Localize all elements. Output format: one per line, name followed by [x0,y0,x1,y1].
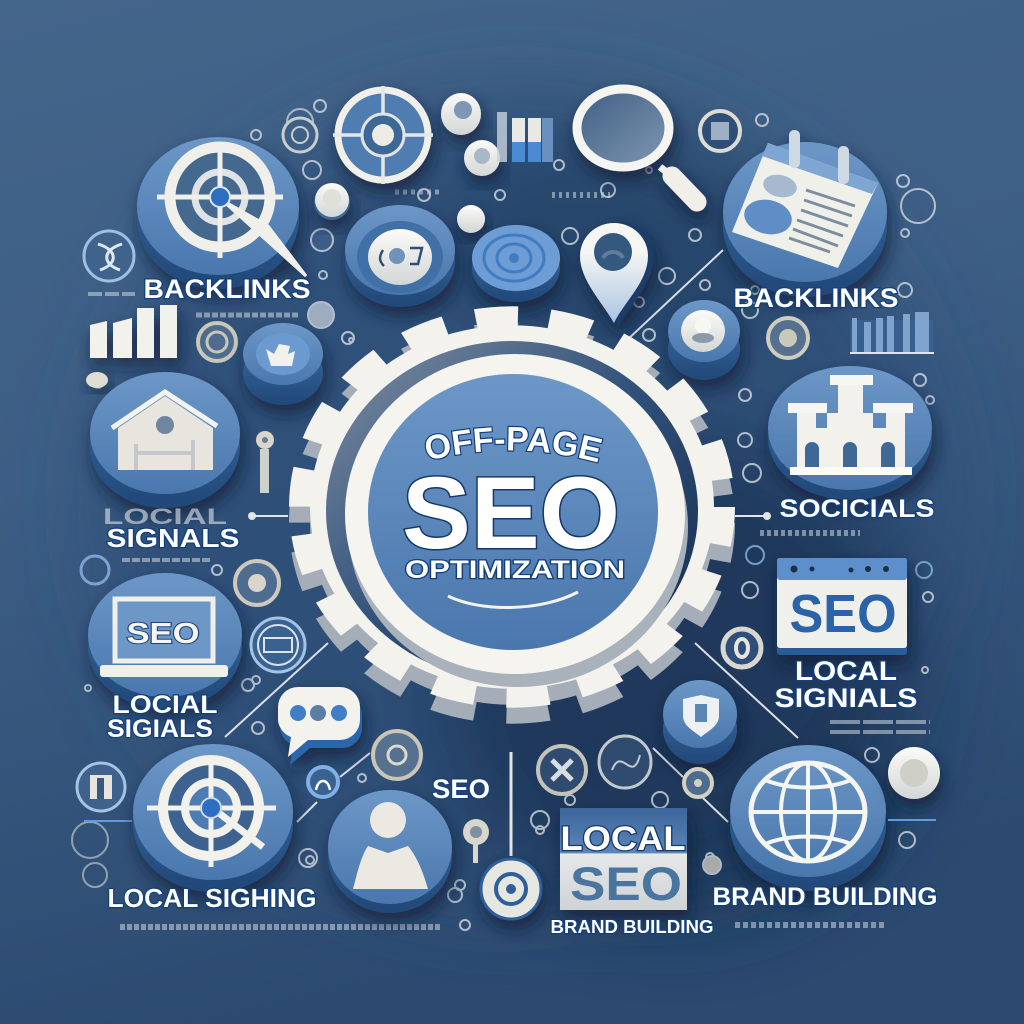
label: brand building large: BRAND BUILDING [712,883,938,911]
icon: person on blue circle [328,790,452,913]
icon: top bars [497,112,553,162]
label: small seo: SEO [432,774,490,804]
icon: swirl ring top [283,118,317,152]
icon: white button with blue centre [441,93,481,135]
panel: local seo block: LOCAL [560,820,686,858]
label: backlinks right: BACKLINKS [734,283,898,313]
icon: ring button top right [700,111,740,151]
icon: shield button [663,680,737,764]
icon: calendar on blue circle [723,130,887,297]
icon: spiral ring left [198,323,236,361]
icon: blue button right [668,300,740,380]
icon: small beige ring [684,769,712,797]
label: local sighing: LOCAL SIGHING [108,883,316,913]
icon: ring right [768,318,808,358]
icon: white button bottom right [888,747,940,799]
panel: central gear [289,306,735,724]
icon: small white button centre [457,205,485,233]
small decorative marks [72,100,935,930]
decorative blue bar left [84,820,132,822]
label: local signals lower left: SIGIALS [107,715,213,743]
label: local signals left: LOCIAL [103,504,227,529]
icon: castle on blue circle [768,366,932,500]
icon: blue circle with target, top left [137,137,306,289]
icon: house on blue circle [90,372,240,508]
heading: seo: SEO [402,456,620,570]
icon: white ring button [464,140,500,176]
icon: map pin [580,222,654,326]
icon: nut ring left [235,561,279,605]
icon: x ring [538,746,586,794]
label: local signals left: SIGNALS [106,523,240,553]
icon: ring with stem [481,752,541,919]
panel: local seo block: SEO [570,857,682,910]
connector to socials [735,512,771,520]
icon: laptop on blue circle [88,573,242,709]
icon: blue ring [308,767,338,797]
icon: magnifying glass [577,89,697,202]
heading: off-page: OFF-PAGE [424,426,604,464]
icon: sketched ring [599,736,651,788]
icon: ring right of gear [723,629,761,667]
icon: globe on blue circle [730,745,886,891]
label: local signals right: SIGNIALS [774,683,918,713]
icon: ring with N left [77,763,125,811]
connector lines [225,250,798,822]
label: local signals right: LOCAL [795,656,897,686]
icon: left bars [90,305,177,358]
icon: crosshair target top [333,86,433,184]
heading: optimization: OPTIMIZATION [405,556,625,584]
label: brand building small: BRAND BUILDING [550,917,714,937]
label: local signals right [774,656,918,713]
icon: blue swirl button [472,225,560,302]
label: local signals lower left [107,691,218,743]
icon: target on blue circle, bottom left [133,744,293,892]
icon: laptop on blue circle: SEO [126,618,200,650]
icon: white button left [314,183,350,220]
icon: thumbs button [243,323,323,405]
icon: speech bubble [278,687,362,765]
icon: small pin [463,819,489,863]
icon: large blue button [345,205,455,307]
icon: right bars [850,312,934,354]
icon: grey ring [373,731,421,779]
card: seo window: SEO [790,584,896,644]
label: local signals lower left: LOCIAL [112,691,218,719]
decorative blue bar right [888,819,936,821]
icon: key and connector [248,431,288,520]
label: socials: SOCICIALS [780,495,934,523]
dark shading behind content [100,100,940,920]
icon: white pebble [86,372,108,388]
icon: building ring [251,618,305,672]
label: local signals left [103,504,240,553]
card: seo window [777,558,907,655]
label: backlinks left: BACKLINKS [144,274,310,304]
icon: ring with letters left [84,231,134,281]
panel: local seo block [560,808,687,910]
